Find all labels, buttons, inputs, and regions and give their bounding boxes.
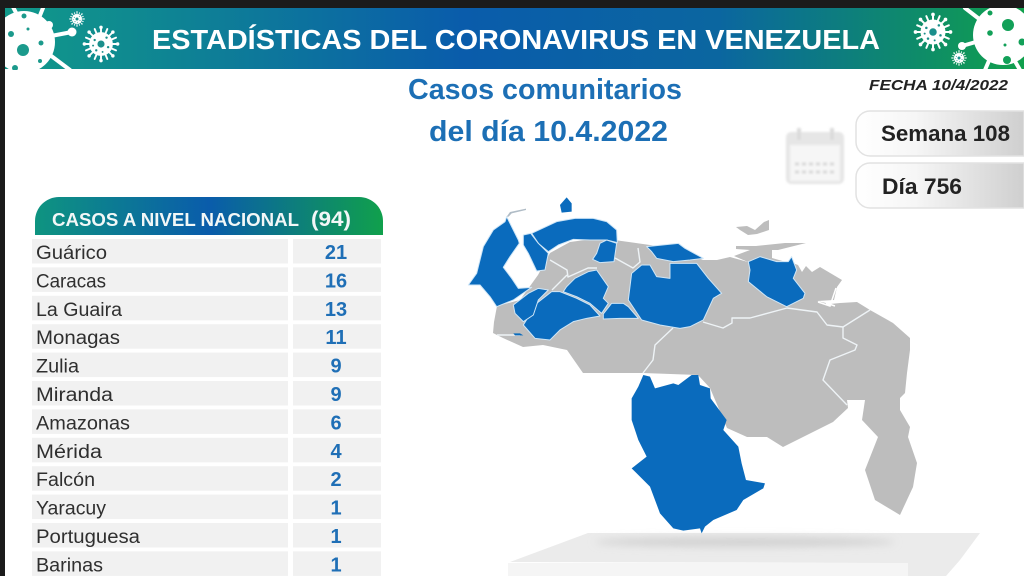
row: Falcón: 2: [330, 469, 342, 491]
row: Amazonas: 6: [330, 412, 342, 434]
banner title: ESTADÍSTICAS DEL CORONAVIRUS EN VENEZUELA: [152, 24, 880, 55]
icon: large virus left: [5, 8, 76, 70]
week pill: Semana 108: [881, 121, 1010, 146]
podium under map: [508, 533, 980, 576]
islands: [734, 220, 806, 262]
row: Zulia: Zulia: [36, 357, 79, 378]
date label: FECHA 10/4/2022: [869, 77, 1009, 94]
row: Yaracuy: 1: [330, 498, 342, 520]
table header: (94): [311, 208, 351, 231]
icon: small virus left: [83, 26, 119, 62]
row: Monagas: [32, 324, 381, 349]
panel: national cases table: [32, 197, 383, 576]
state: Zulia: [468, 217, 532, 307]
state: Monagas: [748, 257, 805, 307]
row: Monagas: 11: [325, 327, 347, 349]
subtitle: del día 10.4.2022: [429, 116, 668, 148]
row: La Guaira: La Guaira: [36, 300, 122, 321]
base silhouette (non-affected states): [493, 238, 917, 515]
header banner: [0, 5, 1024, 73]
icon: tiny virus left: [69, 11, 85, 27]
row: Guárico: [32, 239, 381, 264]
row: Caracas: Caracas: [36, 271, 106, 292]
row: Yaracuy: Yaracuy: [36, 499, 107, 520]
week pill: [856, 111, 1024, 156]
table header: CASOS A NIVEL NACIONAL: [52, 210, 299, 230]
row: Portuguesa: 1: [330, 526, 342, 548]
row: La Guaira: [32, 296, 381, 321]
state: Portuguesa: [563, 270, 608, 313]
state: Amazonas: [632, 375, 765, 533]
row: Barinas: 1: [330, 554, 342, 576]
state: Falcón: [532, 218, 617, 252]
icon: tiny virus right: [951, 50, 967, 66]
state: Guárico: [628, 263, 722, 328]
table header: [35, 197, 383, 235]
row: La Guaira: 13: [325, 299, 347, 321]
state: Barinas: [523, 292, 600, 340]
row: Guárico: 21: [325, 242, 347, 264]
row: Mérida: Mérida: [36, 442, 102, 463]
subtitle: [408, 74, 682, 148]
row: Guárico: Guárico: [36, 243, 107, 264]
row: Zulia: [32, 353, 381, 378]
row: Zulia: 9: [330, 356, 342, 378]
row: Miranda: Miranda: [36, 385, 113, 406]
row: Miranda: 9: [330, 384, 342, 406]
row: Amazonas: [32, 409, 381, 434]
row: Falcón: Falcón: [36, 470, 95, 491]
state: Miranda: [647, 243, 703, 262]
row: Monagas: Monagas: [36, 328, 120, 349]
state: Paraguaná peninsula: [560, 197, 572, 213]
row: Caracas: 16: [325, 270, 347, 292]
state: west of Falcón: [523, 233, 548, 271]
icon: large virus right: [958, 5, 1024, 70]
state: Mérida: [513, 288, 548, 322]
row: Mérida: [32, 438, 381, 463]
row: Barinas: Barinas: [36, 555, 103, 576]
delta inlets: [818, 288, 836, 306]
map of Venezuela: [468, 197, 917, 533]
row: Amazonas: Amazonas: [36, 413, 130, 434]
state: Cojedes: [603, 303, 638, 319]
icon: small virus right: [914, 13, 952, 51]
subtitle: Casos comunitarios: [408, 74, 682, 106]
row: Mérida: 4: [330, 441, 342, 463]
row: Yaracuy: [32, 495, 381, 520]
state: Táchira sliver: [513, 333, 523, 335]
row: Portuguesa: Portuguesa: [36, 527, 140, 548]
day pill: Día 756: [882, 174, 962, 199]
row: Barinas: [32, 551, 381, 576]
state: Yaracuy: [593, 240, 617, 263]
row: Portuguesa: [32, 523, 381, 548]
row: Falcón: [32, 466, 381, 491]
day pill: [856, 163, 1024, 208]
row: Caracas: [32, 267, 381, 292]
row: Miranda: [32, 381, 381, 406]
internal state borders: [497, 248, 870, 405]
state: Zulia tip: [507, 209, 526, 217]
icon: calendar: [786, 128, 844, 184]
